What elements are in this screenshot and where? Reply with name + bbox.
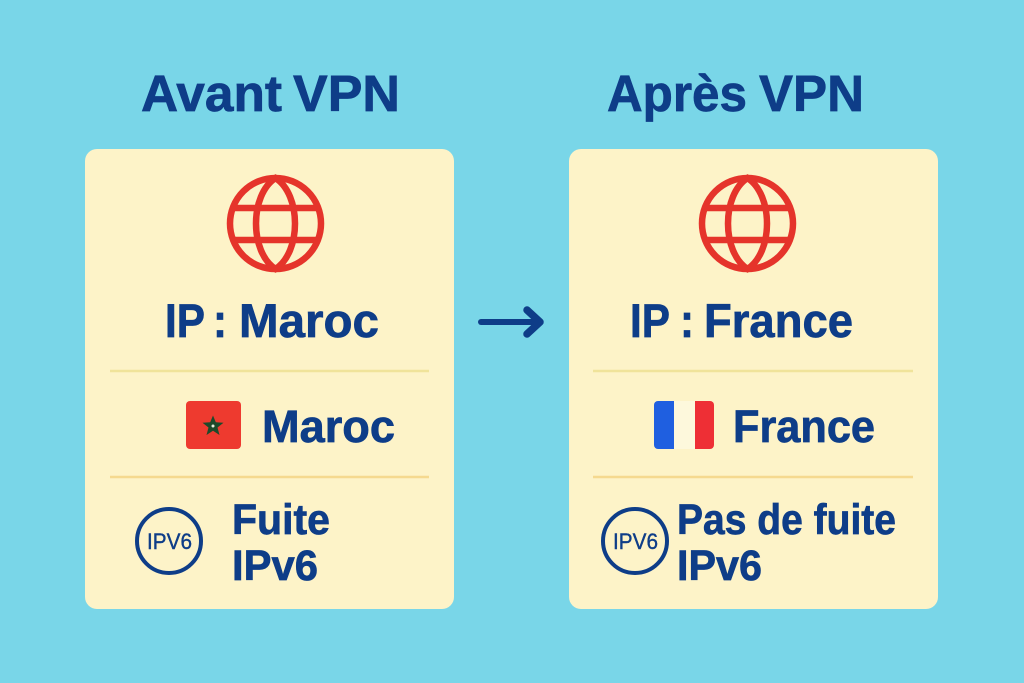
text: Fuite IPv6	[232, 496, 330, 590]
panel: before VPN	[85, 149, 454, 609]
text: IP France: :	[680, 294, 694, 347]
icon: French flag	[654, 401, 714, 449]
heading: Après VPN: VPN	[759, 65, 864, 122]
icon: IPv6 badge	[603, 509, 667, 573]
heading: Avant VPN: VPN	[293, 65, 400, 122]
text: Maroc: Maroc	[262, 401, 395, 452]
text: IP Maroc: Maroc	[239, 294, 379, 347]
icon: red globe	[230, 178, 321, 269]
text: Fuite IPv6: IPv6	[232, 542, 318, 590]
text: IP France: France	[704, 294, 853, 347]
icon: red globe	[702, 178, 793, 269]
icon: IPv6 badge	[137, 509, 201, 573]
text: IP France	[630, 294, 853, 347]
text: IP Maroc: :	[213, 294, 227, 347]
text: Pas de fuite IPv6: Pas de fuite	[677, 496, 896, 544]
heading: Après VPN: Après	[607, 65, 747, 122]
arrow	[481, 310, 540, 334]
text: IP Maroc: IP	[165, 294, 205, 347]
text: France: France	[733, 401, 875, 452]
text: Pas de fuite IPv6	[677, 496, 896, 590]
text: Fuite IPv6: Fuite	[232, 496, 330, 544]
icon: Moroccan flag	[186, 401, 241, 449]
icon: IPv6 badge: IPV6	[147, 529, 192, 554]
text: IP France: IP	[630, 294, 670, 347]
heading: Avant VPN	[141, 65, 400, 122]
panel: after VPN	[569, 149, 938, 609]
text: IP Maroc	[165, 294, 379, 347]
heading: Avant VPN: Avant	[141, 65, 282, 122]
icon: IPv6 badge: IPV6	[613, 529, 658, 554]
heading: Après VPN	[607, 65, 864, 122]
text: Pas de fuite IPv6: IPv6	[677, 542, 762, 590]
